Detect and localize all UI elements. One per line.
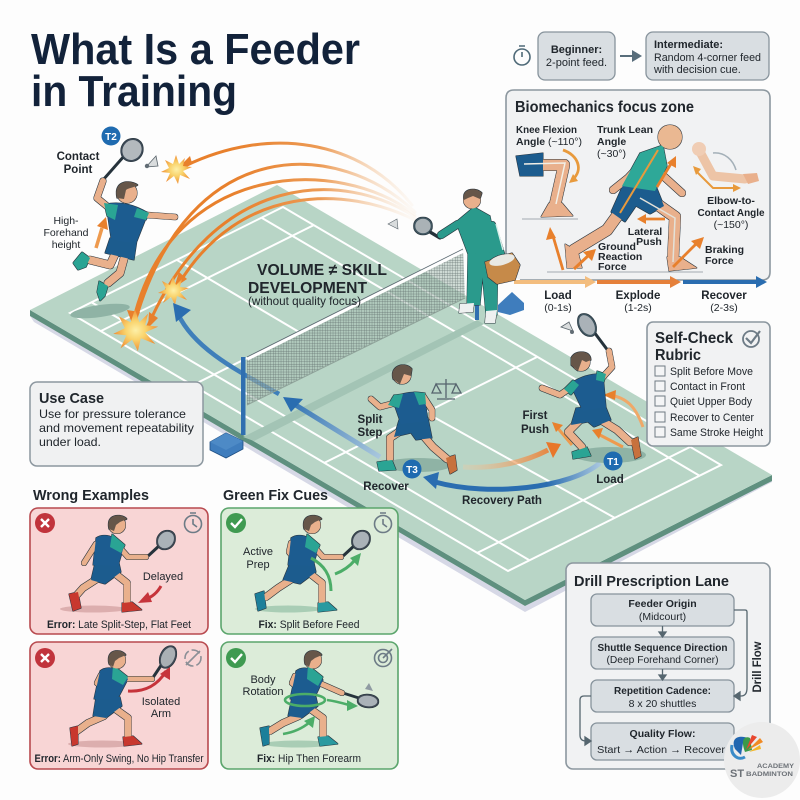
label: active prep	[243, 546, 273, 571]
card: fix 2	[221, 642, 398, 769]
green cue arrows	[311, 553, 361, 591]
label: high forehand height: Forehand	[44, 227, 89, 239]
phase timeline: (1-2s)	[624, 302, 652, 314]
label: high forehand height: height	[52, 239, 80, 251]
panel: use case: under load.	[39, 435, 101, 449]
label: knee flexion angle: Knee Flexion	[516, 124, 577, 136]
academy logo: BADMINTON	[746, 771, 793, 778]
card: fix 1	[221, 508, 398, 634]
impact burst: lower	[113, 309, 158, 351]
title	[31, 25, 360, 116]
box: beginner	[538, 32, 615, 80]
runner figure	[546, 125, 704, 272]
player: hip then forearm	[260, 651, 378, 748]
label: isolated arm: Arm	[151, 708, 171, 720]
panel: use case: Use Case	[39, 390, 104, 407]
box: beginner: Beginner:	[551, 44, 602, 56]
label: elbow to contact angle: Contact Angle	[698, 207, 765, 219]
label: split step	[358, 414, 383, 439]
box: intermediate: Random 4-corner feed	[654, 52, 761, 64]
step: feeder origin: (Midcourt)	[639, 611, 686, 623]
icon: green check	[226, 648, 246, 668]
label: body rotation: Rotation	[243, 686, 283, 698]
checklist: Same Stroke Height	[670, 427, 763, 439]
label: knee flexion angle: Angle (~110°)	[516, 136, 582, 148]
label: braking force: Braking	[705, 244, 744, 256]
step: shuttle sequence direction: Shuttle Sequence Direction	[598, 642, 728, 654]
badge T3: T3	[406, 465, 418, 476]
caption: Error: Late Split-Step, Flat Feet	[47, 619, 191, 631]
flow connectors	[580, 610, 747, 745]
icon: balance scales	[432, 379, 461, 399]
label: body rotation: Body	[250, 674, 276, 686]
panel: self-check rubric: Self-Check	[655, 330, 733, 347]
label: trunk lean angle: Angle	[597, 136, 626, 148]
green rotation and direction arrows	[283, 694, 358, 734]
label: high forehand height	[44, 215, 89, 251]
label: first push	[521, 410, 549, 436]
step: quality flow	[591, 723, 734, 760]
phase timeline: (0-1s)	[544, 302, 572, 314]
caption: Fix: Hip Then Forearm	[257, 753, 361, 765]
label: trunk lean angle: (~30°)	[597, 148, 626, 160]
panel: use case: and movement repeatability	[39, 421, 194, 435]
checklist: Recover to Center	[670, 412, 754, 424]
panel: self-check rubric: Rubric	[655, 347, 701, 364]
step: quality flow: Quality Flow:	[630, 728, 695, 740]
icon: stopwatch	[374, 513, 392, 532]
label: ground reaction force: Force	[598, 261, 627, 273]
icon: target	[374, 649, 392, 666]
box: intermediate: Intermediate:	[654, 39, 723, 51]
feeder coach	[388, 189, 524, 323]
badminton court	[30, 185, 772, 612]
label: lateral push: Lateral	[628, 226, 662, 238]
badge T1: T1	[607, 457, 619, 468]
blue arrow to back court	[173, 303, 279, 394]
knee flexion figure	[516, 150, 578, 219]
impact burst: middle	[158, 276, 189, 305]
impact burst: upper	[161, 155, 192, 184]
label: ground reaction force: Reaction	[598, 251, 642, 263]
shuttlecock near T1	[561, 322, 574, 334]
box: intermediate: with decision cue.	[653, 64, 741, 76]
callout: volume not equal skill development: VOLUME ≠ SKILL	[257, 262, 387, 279]
label: split step: Split	[358, 414, 383, 426]
player T2: jump smash	[69, 135, 175, 321]
panel: biomechanics focus zone: Biomechanics focus zone	[515, 99, 694, 116]
label: drill flow: Drill Flow	[750, 641, 764, 692]
step: shuttle sequence direction	[591, 637, 734, 669]
player: split before feed	[255, 515, 373, 612]
label: recovery path: Recovery Path	[462, 495, 542, 507]
academy logo	[724, 722, 800, 798]
badge T1	[604, 452, 622, 470]
shuttle trajectories	[127, 143, 415, 328]
step: feeder origin	[591, 594, 734, 626]
label: contact point	[57, 151, 100, 176]
panel: drill prescription lane	[566, 563, 770, 769]
label: braking force	[705, 244, 744, 267]
label: braking force: Force	[705, 255, 734, 267]
panel: use case: Use for pressure tolerance	[39, 407, 186, 421]
red swing arrow	[128, 667, 170, 691]
player: late split-step	[60, 515, 178, 612]
phase timeline: Explode	[616, 290, 660, 302]
step: repetition cadence: 8 x 20 shuttles	[629, 698, 696, 710]
box: beginner: 2-point feed.	[546, 57, 607, 69]
label: ground reaction force	[598, 241, 642, 273]
phase timeline: Recover	[701, 290, 747, 302]
arrow: jump height	[96, 217, 108, 248]
panel: biomechanics focus zone	[506, 90, 770, 280]
label: knee flexion angle	[516, 124, 582, 148]
icon: green check	[226, 513, 246, 533]
phase timeline: Load	[544, 290, 572, 302]
checklist	[655, 366, 763, 439]
callout: volume not equal skill development: DEVELOPMENT	[248, 280, 367, 297]
badge T2	[102, 126, 120, 146]
step: repetition cadence: Repetition Cadence:	[614, 685, 711, 697]
icon: check circle	[743, 331, 760, 347]
label: body rotation	[243, 674, 283, 698]
panel: drill prescription lane: Drill Prescription Lane	[574, 573, 729, 590]
badge T3	[402, 460, 422, 478]
box: intermediate	[646, 32, 769, 80]
label: recover: Recover	[363, 481, 409, 493]
academy logo: ACADEMY	[757, 763, 795, 770]
title: What Is a Feeder	[31, 25, 360, 74]
label: delayed: Delayed	[143, 571, 183, 583]
label: lateral push	[628, 226, 662, 248]
step: feeder origin: Feeder Origin	[628, 598, 697, 610]
label: active prep: Active	[243, 546, 273, 558]
icon: red x	[35, 513, 55, 533]
blue recovery path arrow	[423, 463, 600, 489]
label: lateral push: Push	[636, 236, 662, 248]
panel: self-check rubric	[647, 322, 770, 446]
card: wrong example 2	[30, 642, 208, 769]
player T3: split step	[371, 365, 457, 474]
net	[210, 249, 465, 458]
panel: use case	[30, 382, 203, 466]
checklist: Quiet Upper Body	[670, 396, 752, 408]
label: isolated arm	[142, 696, 180, 720]
label: trunk lean angle	[597, 124, 653, 160]
step: quality flow: Start → Action → Recover	[597, 744, 726, 756]
label: first push: Push	[521, 424, 549, 436]
icon: stopwatch	[184, 513, 202, 532]
callout: volume not equal skill development	[248, 262, 387, 308]
label: ground reaction force: Ground	[598, 241, 636, 253]
checklist: Contact in Front	[670, 381, 745, 393]
label: first push: First	[523, 410, 548, 422]
label: active prep: Prep	[246, 559, 270, 571]
title: in Training	[31, 67, 237, 116]
orange first push arrow	[463, 442, 561, 467]
label: isolated arm: Isolated	[142, 696, 180, 708]
caption: Fix: Split Before Feed	[258, 619, 360, 631]
label: split step: Step	[358, 427, 382, 439]
label: elbow to contact angle: Elbow-to-	[707, 195, 755, 207]
step: repetition cadence	[591, 680, 734, 712]
blue arrow toward net	[283, 397, 380, 457]
callout: volume not equal skill development: (without quality focus)	[248, 294, 361, 308]
checklist: Split Before Move	[670, 366, 753, 378]
caption: Error: Arm-Only Swing, No Hip Transfer	[34, 753, 204, 765]
phase timeline: (2-3s)	[710, 302, 738, 314]
label: contact point: Contact	[57, 151, 100, 163]
label: trunk lean angle: Trunk Lean	[597, 124, 653, 136]
label: load: Load	[596, 474, 624, 486]
shuttlecock near T2	[145, 156, 158, 168]
heading: wrong examples: Wrong Examples	[33, 487, 149, 504]
heading: green fix cues: Green Fix Cues	[223, 487, 328, 504]
academy logo: ST	[730, 768, 744, 780]
player T1: load	[542, 311, 646, 463]
arrow: beginner to intermediate	[620, 50, 642, 62]
label: elbow to contact angle: (~150°)	[714, 219, 748, 231]
progression stopwatch icon	[514, 46, 530, 65]
label: elbow to contact angle	[698, 195, 765, 231]
card: wrong example 1	[30, 508, 208, 634]
icon: red x	[35, 648, 55, 668]
phase timeline	[514, 276, 767, 314]
shuttlecock	[365, 683, 373, 691]
player: arm-only swing	[68, 644, 179, 748]
label: high forehand height: High-	[53, 215, 79, 227]
step: shuttle sequence direction: (Deep Forehand Corner)	[606, 654, 718, 666]
icon: no rotation	[185, 650, 201, 666]
red arrow	[138, 586, 161, 603]
badge T2: T2	[105, 132, 117, 143]
elbow angle figure	[692, 142, 759, 192]
label: contact point: Point	[64, 164, 93, 176]
